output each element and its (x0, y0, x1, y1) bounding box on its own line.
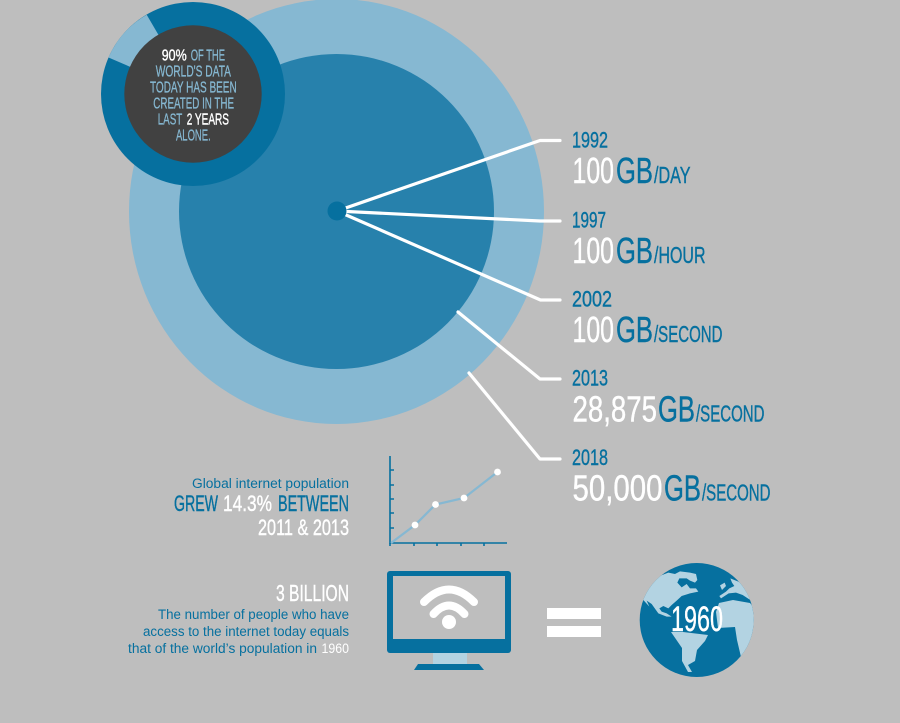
stat: 2018: GB (664, 468, 701, 508)
text: 3 billion: The number of people who have (158, 607, 349, 622)
stat: 2002: 2002 (572, 287, 612, 312)
stat: 2013: 28,875 (572, 388, 657, 430)
text: 3 billion: 3 BILLION (276, 580, 349, 606)
line chart (390, 456, 507, 546)
callout: 90 percent of data: WORLD'S DATA (156, 64, 231, 80)
stat: 2013 (572, 366, 764, 430)
stat: 2002: GB (616, 309, 653, 350)
callout: 90 percent of data: LAST (158, 112, 182, 128)
text: global internet population growth: GREW (174, 491, 218, 516)
callout: 90 percent of data: CREATED IN THE (153, 96, 234, 112)
callout: 90 percent of data: TODAY HAS BEEN (150, 80, 237, 96)
text: global internet population growth: BETWEEN (278, 491, 349, 516)
concentric data circles (129, 0, 544, 424)
stat: 1997: /HOUR (654, 242, 706, 268)
stat: 2013: GB (658, 388, 695, 430)
stat: 1992: 1992 (572, 128, 608, 152)
stat: 1997: 1997 (572, 208, 606, 232)
stat: 2018: /SECOND (702, 480, 770, 506)
text: global internet population growth: 14.3% (223, 491, 272, 516)
stat: 1997: GB (616, 230, 653, 271)
stat: 2018: 50,000 (572, 468, 662, 508)
stat: 2018: 2018 (572, 445, 608, 470)
center dot (328, 202, 346, 220)
callout: 90 percent of data: ALONE. (176, 128, 211, 144)
text: global internet population growth: 2011 & 2013 (258, 515, 349, 540)
connector lines from center to each year (337, 140, 560, 459)
stat: 1997 (572, 208, 706, 271)
callout: 90 percent of data: 90% (162, 48, 187, 64)
text: global internet population growth: Global internet population (192, 476, 349, 491)
stat: 1992: 100 (572, 150, 614, 191)
text: 3 billion: that of the world’s population in (128, 641, 317, 656)
icon: globe 1960 (640, 563, 760, 677)
callout: 90 percent of data: 2 YEARS (187, 112, 229, 128)
stat: 1992 (572, 128, 690, 191)
stat: 2013: 2013 (572, 366, 608, 390)
stat: 2018 (572, 445, 770, 508)
text: global internet population growth (174, 476, 349, 540)
stat: 2002 (572, 287, 722, 350)
stat: 2002: /SECOND (654, 321, 722, 347)
callout: 90 percent of data (101, 2, 285, 186)
text: 3 billion (128, 580, 349, 656)
stat: 1992: /DAY (654, 162, 690, 188)
icon: equals sign (547, 608, 601, 637)
callout: 90 percent of data: OF THE (191, 48, 225, 64)
stat: 1997: 100 (572, 230, 614, 271)
icon: globe 1960: 1960 (671, 600, 723, 639)
stat: 1992: GB (616, 150, 653, 191)
stat: 2013: /SECOND (696, 400, 764, 426)
stat: 2002: 100 (572, 309, 614, 350)
icon: monitor with wifi (387, 571, 511, 670)
text: 3 billion: 1960 (322, 641, 349, 656)
text: 3 billion: access to the internet today equals (143, 624, 349, 639)
